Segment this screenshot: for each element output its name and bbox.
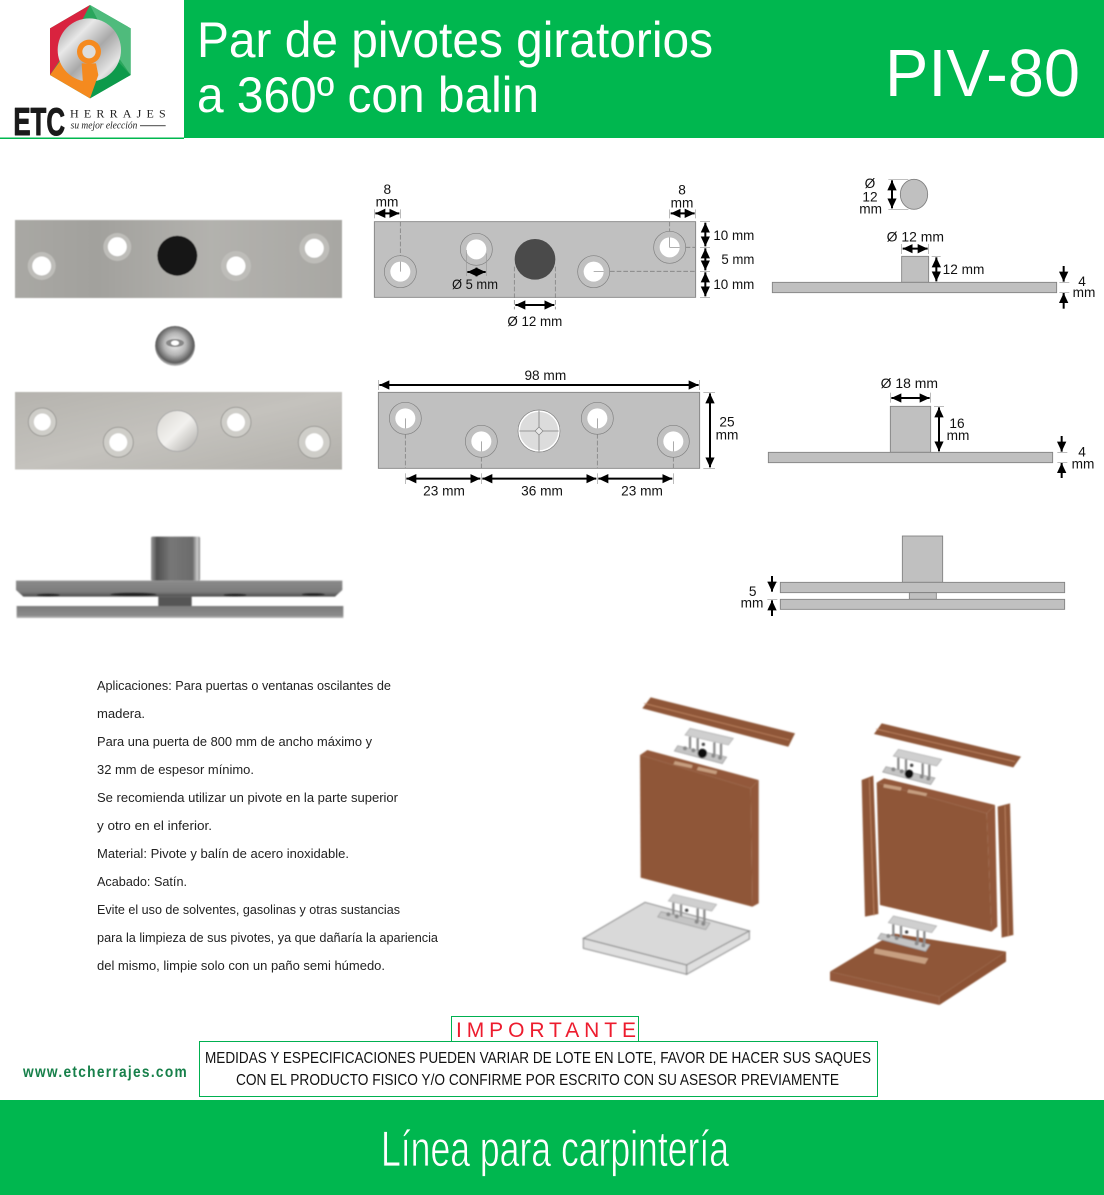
- diagram: bottom plate dimensions: 36 mm: [521, 483, 563, 498]
- diagram: large post profile and assembled profile: Ø 18 mm: [881, 376, 938, 391]
- important note box: [200, 1042, 878, 1096]
- diagram: bottom plate dimensions: 23 mm: [423, 483, 465, 498]
- description text: madera.: [97, 706, 145, 721]
- diagram: large post profile and assembled profile: mm: [741, 595, 763, 610]
- diagram: large post profile and assembled profile: [741, 376, 1094, 616]
- diagram: ball and short post profile: 12 mm: [943, 262, 984, 277]
- diagram: large post profile and assembled profile: mm: [947, 428, 969, 443]
- diagram: top plate dimensions: mm: [376, 195, 398, 210]
- illustration: door with pivots on a grey base: [583, 697, 795, 974]
- photo: plate back view with cone: [15, 392, 342, 470]
- description text: Evite el uso de solventes, gasolinas y otras sustancias: [97, 902, 400, 917]
- description text: del mismo, limpie solo con un paño semi húmedo.: [97, 958, 385, 973]
- diagram: top plate dimensions: Ø 12 mm: [507, 314, 562, 329]
- photo: side view of pivot pair: [16, 537, 343, 618]
- title: [197, 12, 713, 123]
- description text: 32 mm de espesor mínimo.: [97, 762, 254, 777]
- model code: PIV-80: [885, 36, 1080, 111]
- diagram: bottom plate dimensions: 23 mm: [621, 483, 663, 498]
- description text: [97, 678, 439, 973]
- illustration: door with pivots in a wooden frame: [830, 723, 1021, 1005]
- diagram: ball and short post profile: mm: [859, 201, 882, 216]
- website: www.etcherrajes.com: [22, 1064, 188, 1081]
- description text: Para una puerta de 800 mm de ancho máximo y: [97, 734, 372, 749]
- diagram: bottom plate dimensions: 25: [719, 415, 735, 430]
- description text: para la limpieza de sus pivotes, ya que dañaría la apariencia: [97, 930, 439, 945]
- footer band: [0, 1100, 1104, 1195]
- photo: steel ball: [155, 326, 195, 366]
- important heading: IMPORTANTE: [456, 1019, 636, 1042]
- diagram: large post profile and assembled profile: 16: [949, 416, 965, 431]
- description text: y otro en el inferior.: [97, 818, 212, 833]
- logo: ETC Herrajes: ETC: [13, 101, 65, 144]
- diagram: ball and short post profile: 12: [862, 190, 878, 205]
- diagram: ball and short post profile: Ø: [865, 176, 876, 191]
- diagram: top plate dimensions: [374, 182, 754, 329]
- header band: [0, 0, 1104, 139]
- diagram: top plate dimensions: mm: [671, 195, 693, 210]
- diagram: large post profile and assembled profile: mm: [1072, 456, 1094, 471]
- diagram: top plate dimensions: 8: [678, 183, 686, 198]
- diagram: top plate dimensions: Ø 5 mm: [452, 277, 498, 292]
- diagram: top plate dimensions: 10 mm: [713, 228, 754, 243]
- logo: ETC Herrajes: su mejor elección: [71, 121, 137, 132]
- description text: Material: Pivote y balín de acero inoxidable.: [97, 846, 349, 861]
- description text: Acabado: Satín.: [97, 874, 187, 889]
- diagram: ball and short post profile: Ø 12 mm: [887, 229, 944, 244]
- footer band: Línea para carpintería: [381, 1121, 729, 1177]
- diagram: top plate dimensions: 5 mm: [721, 252, 754, 267]
- important note box: CON EL PRODUCTO FISICO Y/O CONFIRME POR ESCRITO CON SU ASESOR PREVIAMENTE: [236, 1072, 839, 1089]
- diagram: top plate dimensions: 8: [384, 182, 391, 197]
- diagram: large post profile and assembled profile: 4: [1078, 445, 1086, 460]
- logo: ETC Herrajes: [13, 5, 166, 144]
- diagram: large post profile and assembled profile: 5: [749, 584, 757, 599]
- title: Par de pivotes giratorios: [197, 12, 713, 68]
- logo: ETC Herrajes: HERRAJES: [70, 107, 166, 121]
- diagram: top plate dimensions: 10 mm: [713, 277, 754, 292]
- photo: plate top view with black socket: [15, 220, 342, 298]
- diagram: ball and short post profile: 4: [1078, 274, 1086, 289]
- diagram: bottom plate dimensions: 98 mm: [524, 368, 566, 383]
- diagram: bottom plate dimensions: [378, 368, 738, 498]
- diagram: ball and short post profile: [772, 176, 1095, 309]
- description text: Se recomienda utilizar un pivote en la parte superior: [97, 790, 399, 805]
- important note box: MEDIDAS Y ESPECIFICACIONES PUEDEN VARIAR DE LOTE EN LOTE, FAVOR DE HACER SUS SAQUES: [205, 1050, 871, 1067]
- description text: Aplicaciones: Para puertas o ventanas oscilantes de: [97, 678, 391, 693]
- title: a 360º con balin: [197, 67, 539, 123]
- diagram: ball and short post profile: mm: [1073, 285, 1095, 300]
- diagram: bottom plate dimensions: mm: [716, 427, 738, 442]
